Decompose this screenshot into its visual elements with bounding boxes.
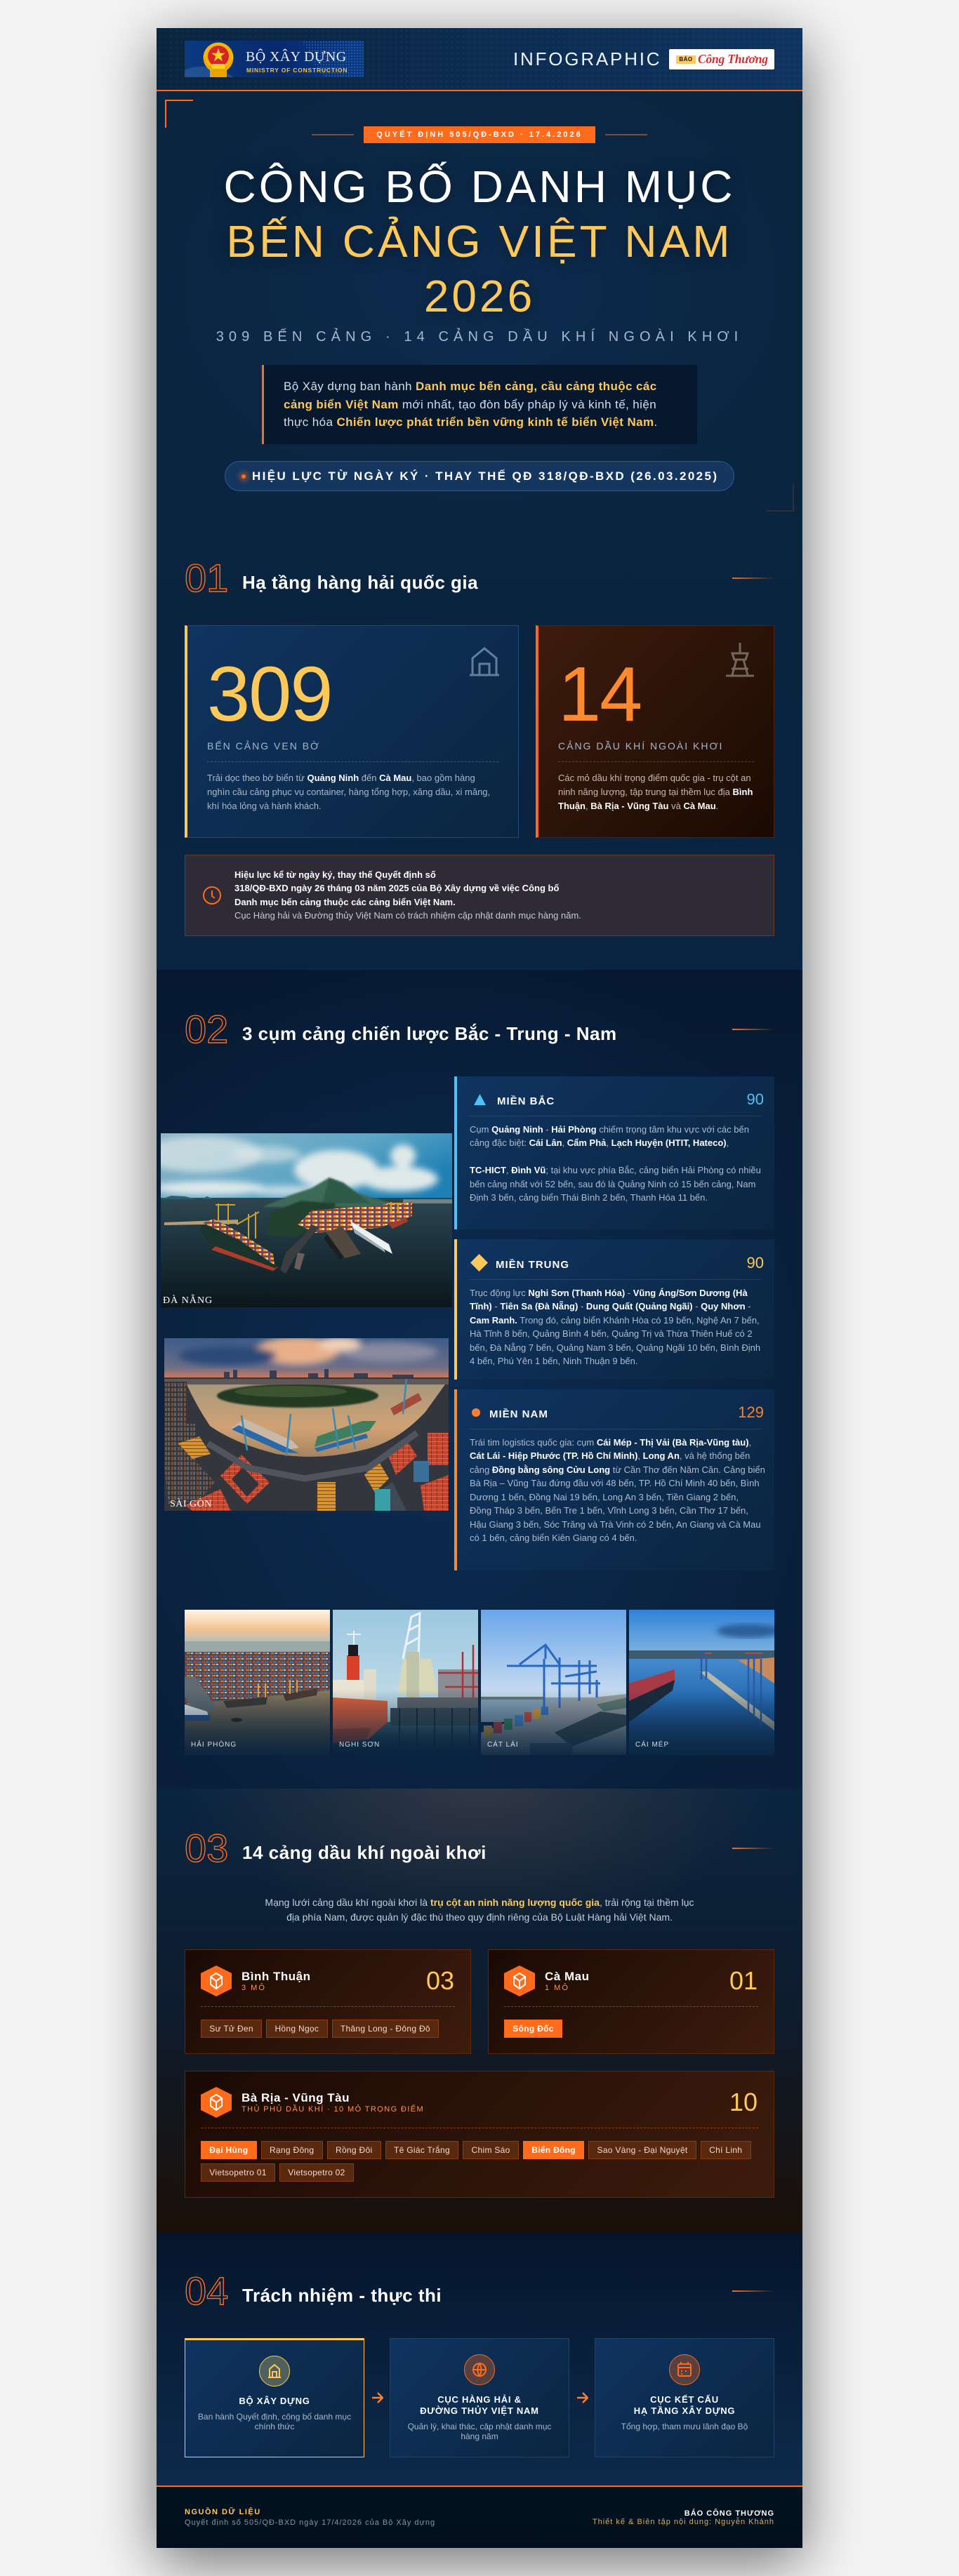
note text [234, 869, 581, 921]
section 04: responsibilities [157, 2233, 802, 2485]
flow card: Cục Kết cấu [595, 2338, 774, 2457]
heading text: Trách nhiệm - thực thi [242, 2285, 442, 2306]
pill text: HIỆU LỰC TỪ NGÀY KÝ · THAY THẾ QĐ 318/QĐ-BXD (26.03.2025) [252, 469, 718, 483]
card: Bà Rịa - Vũng Tàu [185, 2071, 774, 2198]
heading rule [732, 2290, 774, 2292]
description: Thuận, Bà Rịa - Vũng Tàu và Cà Mau. [558, 801, 718, 811]
panel: Miền Bắc [454, 1076, 774, 1229]
hero [157, 91, 802, 519]
flow card: Bộ Xây dựng [185, 2338, 364, 2457]
field tags: Chim Sáo [472, 2145, 510, 2155]
field tags: Sông Đốc [512, 2024, 554, 2034]
icon: globe [464, 2354, 495, 2385]
heading text: Hạ tầng hàng hải quốc gia [242, 572, 478, 593]
intro text box: thực hóa Chiến lược phát triển bền vững kinh tế biển Việt Nam. [284, 415, 658, 429]
text: TC-HICT, Đình Vũ; tại khu vực phía Bắc, cảng biển Hải Phòng có nhiều [470, 1165, 761, 1175]
photo: Đà Nẵng [161, 1133, 452, 1307]
field tags: Sư Tử Đen [209, 2024, 253, 2034]
description: Trải dọc theo bờ biển từ Quảng Ninh đến Cà Mau, bao gồm hàng [207, 773, 475, 783]
heading text: 3 cụm cảng chiến lược Bắc - Trung - Nam [242, 1023, 617, 1044]
region name: MIỀN NAM [489, 1408, 548, 1420]
icon: building [259, 2356, 290, 2387]
card: Bình Thuận [185, 1949, 471, 2054]
label: CẢNG DẦU KHÍ NGOÀI KHƠI [558, 740, 723, 752]
heading rule [732, 1029, 774, 1030]
count: 03 [426, 1966, 454, 1994]
name: HẠ TẦNG XÂY DỰNG [634, 2405, 735, 2415]
field tags: Thăng Long - Đông Đô [340, 2024, 430, 2034]
description [207, 773, 490, 811]
intro text box: cảng biển Việt Nam mới nhất, tạo đòn bẩy pháp lý và kinh tế, hiện [284, 398, 656, 411]
arrow 1 [372, 2392, 383, 2403]
description: nghìn cầu cảng phục vụ container, hàng tổng hợp, xăng dầu, xi măng, [207, 787, 490, 797]
photo fade [185, 1610, 330, 1755]
heading text: 14 cảng dầu khí ngoài khơi [242, 1842, 487, 1863]
section 02: three port clusters [157, 970, 802, 1789]
heading 04 [185, 2276, 773, 2306]
decree badge [364, 126, 595, 143]
photo strip: Hải Phòng [185, 1610, 330, 1751]
logo: Bộ Xây dựng: BỘ XÂY DỰNG [246, 48, 347, 65]
description: ninh năng lượng, tập trung tại thềm lục địa Bình [558, 787, 753, 797]
dashed rule [504, 2006, 758, 2007]
icon: port building [470, 647, 499, 676]
subtitle: THỦ PHỦ DẦU KHÍ · 10 MỎ TRỌNG ĐIỂM [242, 2105, 424, 2114]
text: cảng Đồng bằng sông Cửu Long từ Cần Thơ đến Năm Căn. Cảng biển [470, 1464, 765, 1475]
field tags: Rồng Đôi [336, 2145, 372, 2155]
name: CỤC HÀNG HẢI & [437, 2394, 522, 2404]
duty: Tổng hợp, tham mưu lãnh đạo Bộ [621, 2422, 748, 2431]
text: Cát Lái - Hiệp Phước (TP. Hồ Chí Minh), Long An, và hệ thống bến [470, 1450, 750, 1461]
logo: Bộ Xây dựng: MINISTRY OF CONSTRUCTION [246, 67, 348, 74]
icon: dot [472, 1408, 480, 1417]
text: Trục động lực Nghi Sơn (Thanh Hóa) - Vũng Áng/Sơn Dương (Hà [470, 1288, 748, 1298]
field tags: Rạng Đông [270, 2145, 314, 2155]
icon: diamond [470, 1254, 488, 1272]
source label: NGUỒN DỮ LIỆU [185, 2508, 261, 2516]
source text: Quyết định số 505/QĐ-BXD ngày 17/4/2026 của Bộ Xây dựng [185, 2518, 435, 2527]
badge: Báo [676, 55, 696, 64]
intro paragraph [265, 1897, 694, 1923]
title: CÔNG BỐ DANH MỤC [224, 161, 735, 212]
icon: clock [203, 886, 221, 905]
description: khí hóa lỏng và hành khách. [207, 801, 322, 811]
footer [157, 2485, 802, 2548]
section 01: national infrastructure [157, 519, 802, 970]
caption: CÁT LÁI [487, 1741, 519, 1749]
photo strip: Cái Mép [629, 1610, 774, 1755]
text: bến cảng nhất với 52 bến, sau đó là Quảng Ninh có 15 bến cảng, Nam [470, 1179, 755, 1189]
card: Cà Mau [488, 1949, 774, 2054]
page card shadow [157, 28, 802, 2548]
field tags: Vietsopetro 02 [288, 2168, 345, 2177]
subtitle: 1 MỎ [545, 1984, 569, 1992]
heading 01 [185, 563, 773, 593]
text [470, 1437, 765, 1543]
dashed rule [207, 761, 498, 762]
photo: Đà Nẵng: ĐÀ NẴNG [163, 1293, 213, 1306]
photo fade [333, 1610, 478, 1755]
header bar [157, 28, 802, 91]
badge line left [312, 134, 354, 135]
note text: Hiệu lực kể từ ngày ký, thay thế Quyết định số [234, 869, 436, 880]
name: ĐƯỜNG THỦY VIỆT NAM [420, 2405, 539, 2415]
intro text box [262, 365, 697, 444]
icon: hex rig [201, 2087, 232, 2118]
label: BẾN CẢNG VEN BỜ [207, 740, 320, 752]
logo: Bộ Xây dựng [185, 41, 364, 77]
name: Cà Mau [545, 1970, 589, 1983]
divider [470, 1279, 762, 1280]
text: Định 3 bến, cảng biển Thái Bình 2 bến, Thanh Hóa 11 bến. [470, 1192, 708, 1203]
panel: Miền Trung [454, 1239, 774, 1380]
effect pill [225, 461, 734, 491]
photo fade [629, 1610, 774, 1755]
text [470, 1124, 761, 1203]
text: Cụm Quảng Ninh - Hải Phòng chiếm trọng tâm khu vực với các bến [470, 1124, 749, 1135]
photo strip: Nghi Sơn [333, 1610, 478, 1749]
caption: CÁI MÉP [635, 1741, 669, 1749]
number 14: 14 [558, 651, 641, 738]
icon: triangle [474, 1094, 486, 1105]
title: 2026 [424, 271, 535, 321]
field tags: Biển Đông [531, 2145, 576, 2155]
decree badge: QUYẾT ĐỊNH 505/QĐ-BXD · 17.4.2026 [376, 131, 583, 139]
region name: MIỀN BẮC [497, 1095, 555, 1107]
dashed rule [558, 761, 754, 762]
description [558, 773, 753, 811]
heading rule [732, 1848, 774, 1849]
text: Đồng Tháp 3 bến, Bến Tre 1 bến, Vĩnh Long 3 bến, Cần Thơ 17 bến, [470, 1505, 748, 1516]
text: Hà Tĩnh 8 bến, Quảng Bình 4 bến, Quảng Trị và Thừa Thiên Huế có 2 [470, 1328, 753, 1339]
number 309: 309 [207, 651, 332, 738]
note bar [185, 855, 774, 936]
pill dot [242, 474, 246, 479]
icon: hex rig [201, 1966, 232, 1996]
stat card: 309 [185, 625, 519, 838]
corner top-left [165, 100, 193, 128]
photo fade [481, 1610, 626, 1755]
title: BẾN CẢNG VIỆT NAM [226, 216, 733, 267]
name: CỤC KẾT CẤU [650, 2394, 719, 2404]
heading 03 [185, 1834, 773, 1863]
dashed rule [201, 2006, 455, 2007]
field tags: Vietsopetro 01 [209, 2168, 267, 2177]
text: Dương 1 bến, Đồng Nai 19 bến, Long An 3 bến, Tiền Giang 2 bến, [470, 1492, 739, 1502]
section 03: offshore oil and gas ports [157, 1789, 802, 2233]
intro text box: Bộ Xây dựng ban hành Danh mục bến cảng, cầu cảng thuộc các [284, 380, 657, 393]
badge line right [605, 134, 647, 135]
heading rule [732, 578, 774, 579]
text: Bà Rịa – Vũng Tàu đứng đầu với 48 bến, TP. Hồ Chí Minh 40 bến, Bình [470, 1478, 760, 1488]
credit: Thiết kế & Biên tập nội dung: Nguyễn Khánh [593, 2518, 774, 2526]
region name: MIỀN TRUNG [496, 1259, 569, 1271]
count: 129 [738, 1403, 764, 1421]
text: Trái tim logistics quốc gia: cụm Cái Mép - Thị Vải (Bà Rịa-Vũng tàu), [470, 1437, 751, 1448]
text [470, 1288, 760, 1366]
field tags: Sao Vàng - Đại Nguyệt [597, 2145, 688, 2155]
heading 02 [185, 1015, 773, 1044]
icon: oil rig [726, 643, 754, 676]
name [420, 2394, 539, 2415]
text: bến, Đà Nẵng 7 bến, Quảng Nam 3 bến, Quảng Ngãi 10 bến, Bình Định [470, 1342, 760, 1353]
note text: Danh mục bến cảng thuộc các cảng biển Việt Nam. [234, 897, 456, 907]
logo: Báo Công Thương [669, 49, 774, 69]
caption: HẢI PHÒNG [191, 1741, 237, 1749]
arrow 2 [577, 2392, 588, 2403]
note text: 318/QĐ-BXD ngày 26 tháng 03 năm 2025 của Bộ Xây dựng về việc Công bố [234, 883, 559, 893]
corner bottom-right [766, 483, 794, 512]
count: 10 [729, 2087, 758, 2116]
text: có 1 bến, cảng biển Kiên Giang có 4 bến. [470, 1533, 637, 1543]
field tags [201, 2020, 439, 2038]
title [224, 161, 735, 321]
description: Các mỏ dầu khí trọng điểm quốc gia - trụ cột an [558, 773, 751, 783]
photo: Sài Gòn [164, 1338, 449, 1511]
photo strip: Cát Lái [481, 1610, 626, 1755]
name: Bà Rịa - Vũng Tàu [242, 2091, 350, 2104]
subtitle: 309 BẾN CẢNG · 14 CẢNG DẦU KHÍ NGOÀI KHƠI [216, 329, 743, 345]
photo: Sài Gòn: SÀI GÒN [170, 1497, 212, 1509]
note text: Cục Hàng hải và Đường thủy Việt Nam có trách nhiệm cập nhật danh mục hàng năm. [234, 910, 581, 921]
intro paragraph: địa phía Nam, được quản lý đặc thù theo quy định riêng của Bộ Luật Hàng hải Việt Nam. [286, 1911, 673, 1923]
caption: NGHI SƠN [339, 1741, 380, 1749]
subtitle: 3 MỎ [242, 1984, 266, 1992]
text: Cam Ranh. Trong đó, cảng biển Khánh Hòa có 19 bến, Nghệ An 7 bến, [470, 1315, 760, 1326]
field tags: Hồng Ngọc [275, 2024, 319, 2034]
wordmark: Công Thương [698, 52, 768, 66]
stat card: 14 [536, 625, 774, 838]
name: BỘ XÂY DỰNG [239, 2396, 310, 2405]
publisher: BÁO CÔNG THƯƠNG [684, 2509, 774, 2518]
field tags [201, 2141, 751, 2182]
count: 90 [747, 1254, 764, 1272]
text: 4 bến, Phú Yên 1 bến, Ninh Thuận 9 bến. [470, 1356, 637, 1366]
intro paragraph: Mạng lưới cảng dầu khí ngoài khơi là trụ cột an ninh năng lượng quốc gia, trải rộng tại thềm lục [265, 1897, 694, 1908]
duty: Ban hành Quyết định, công bố danh mục chính thức [198, 2412, 351, 2431]
text: Hậu Giang 3 bến, Sóc Trăng và Trà Vinh có 2 bến, An Giang và Cà Mau [470, 1519, 761, 1530]
panel: Miền Nam [454, 1389, 774, 1570]
name [634, 2394, 735, 2415]
flow card: Cục Hàng hải [390, 2338, 569, 2457]
name: Bình Thuận [242, 1970, 310, 1983]
field tags: Chí Linh [709, 2145, 742, 2155]
field tags: Tê Giác Trắng [394, 2145, 450, 2155]
count: 90 [747, 1090, 764, 1108]
text: Tĩnh) - Tiên Sa (Đà Nẵng) - Dung Quất (Quảng Ngãi) - Quy Nhơn - [470, 1301, 751, 1312]
label: INFOGRAPHIC: INFOGRAPHIC [513, 48, 661, 69]
text: cảng đặc biệt: Cái Lân, Cẩm Phả, Lạch Huyện (HTIT, Hateco), [470, 1137, 729, 1148]
field tags: Đại Hùng [209, 2145, 248, 2155]
badge: Báo: BÁO [679, 56, 693, 62]
count: 01 [729, 1966, 758, 1994]
duty: Quản lý, khai thác, cập nhật danh mục hàng năm [408, 2422, 551, 2441]
icon: hex rig [504, 1966, 535, 1996]
icon: calendar [669, 2354, 700, 2385]
